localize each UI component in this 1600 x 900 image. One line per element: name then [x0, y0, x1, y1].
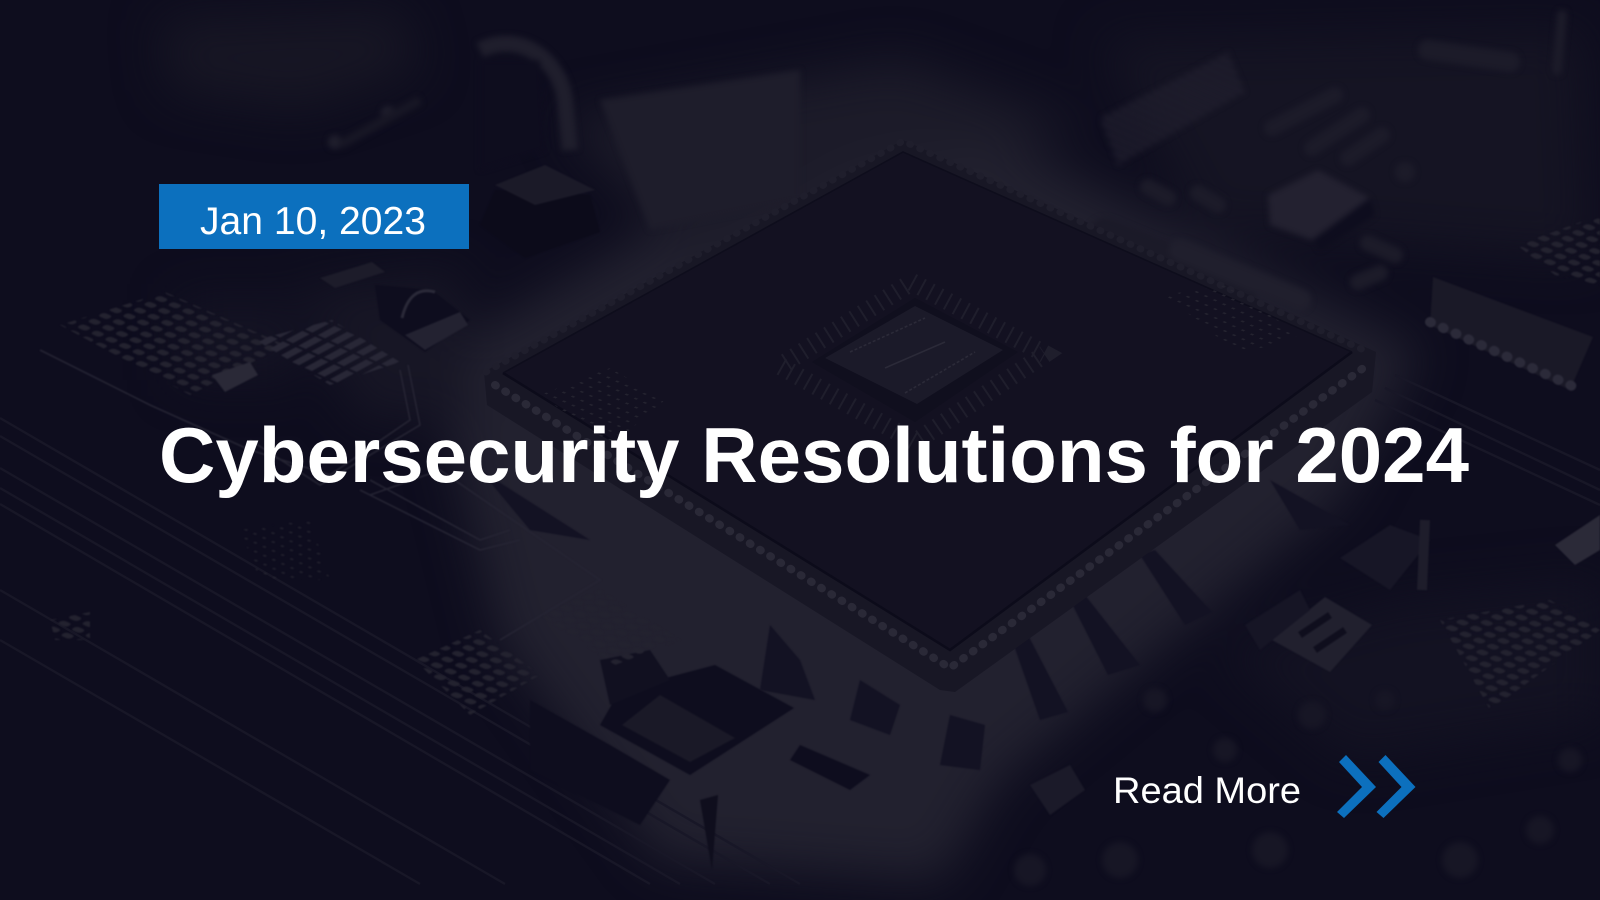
out of focus top parts: [328, 15, 1582, 886]
date text: Jan 10, 2023: [200, 200, 426, 243]
top-left dark ic: [480, 190, 600, 258]
title: Cybersecurity Resolutions for 2024: [159, 411, 1469, 499]
chip edges: [486, 141, 1368, 668]
left connector: [375, 285, 470, 352]
lower-left dark ic: [530, 700, 670, 825]
processor legs: [480, 470, 1350, 770]
top-left arc part: [480, 44, 570, 150]
right block: [1268, 170, 1370, 240]
dark wedge under board: [700, 795, 718, 870]
curved traces left of processor: [40, 350, 600, 640]
inner die: [812, 298, 1018, 422]
lower right parts: [1272, 597, 1372, 672]
icon: double chevron arrow: [1337, 755, 1416, 818]
inner die pins: [780, 282, 1045, 442]
central processor chip: [484, 140, 1376, 692]
read more text: Read More: [1113, 770, 1301, 811]
parallel traces lower left: [0, 375, 1600, 884]
in-focus components: [50, 165, 1600, 870]
date badge: [159, 184, 469, 249]
top-right capsules: [1105, 15, 1562, 300]
chip dot texture: [540, 368, 665, 445]
chip base: [484, 140, 1376, 692]
lower right bokeh: [1014, 688, 1582, 886]
left component grid: [60, 292, 285, 395]
chip body: [503, 152, 1352, 650]
lower pads: [540, 590, 680, 665]
read more link: [1113, 755, 1416, 818]
right connector: [1430, 277, 1593, 390]
striped connector: [1100, 52, 1245, 165]
left resistor strip: [256, 320, 400, 385]
